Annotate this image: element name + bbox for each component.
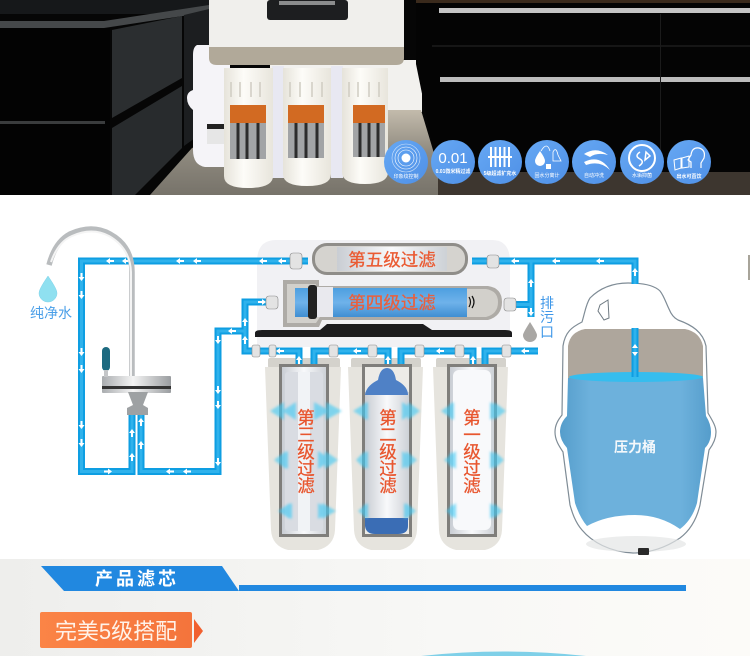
label: drain outlet: 污 [540,309,554,325]
water drop [39,276,57,302]
faucet base [102,376,171,393]
feature badges [384,140,711,184]
badge: fingerprint control: 印象纹控制 [393,173,419,180]
vertical label: first stage: 级 [463,442,481,462]
vertical label: first stage: 一 [463,425,481,445]
filter bowl: first stage [433,358,508,550]
fourth stage filter: 第四级过滤 [348,293,436,313]
unit housing [255,240,512,347]
vertical label: first stage [463,408,481,496]
vertical label: first stage: 过 [463,459,481,479]
filter bowl: third stage [265,358,341,550]
water flow diamonds [270,402,506,519]
lower section background [0,559,750,656]
badge: scale inhibition [620,140,664,184]
faucet handle [102,347,110,371]
tank water [560,378,711,529]
label: pure water: 纯净水 [30,305,72,321]
drain drop [523,322,537,342]
badge: fingerprint control [384,140,428,184]
faucet [49,229,171,415]
vertical label: third stage: 第 [297,408,315,428]
orange tag: 完美5级搭配 [55,619,177,644]
faucet stem [127,392,148,415]
faucet spout [49,229,132,377]
hero photo: kitchen with purifier [0,0,750,195]
pressure tank [555,283,716,555]
label: drain outlet: 排 [540,295,554,311]
badge: auto rinse: 自动冲洗 [584,172,604,179]
orange tag [40,612,203,648]
badge: 0.01 micron: 0.01微米精过滤 [436,168,470,175]
fifth stage filter: 第五级过滤 [348,250,436,270]
filter cartridges in photo [224,66,388,188]
badge: five stage filter: 5级超滤扩充水 [484,170,516,177]
tank label: 压力桶 [614,439,656,455]
section heading: product filters [41,566,686,591]
pressure tank in photo [187,45,230,167]
tank foot [638,548,649,555]
fourth stage filter [283,280,502,327]
pipe connectors [252,253,516,357]
tank handle [598,300,609,320]
badge: 0.01 micron: 0.01 [438,150,468,167]
badge: direct drinking: 出水可直饮 [676,173,702,180]
vertical label: second stage: 滤 [379,476,397,496]
fifth stage filter [312,243,468,275]
vertical label: second stage: 过 [379,459,397,479]
section heading: product filters: 产品滤芯 [95,569,179,589]
tank shadow [586,536,686,552]
left cabinet [0,0,210,195]
right cabinet [416,0,750,172]
background wall behind the unit [270,60,422,112]
vertical label: second stage: 级 [379,442,397,462]
filter bowl: second stage [348,358,423,550]
vertical label: third stage: 过 [297,459,315,479]
badge: five stage filter [478,140,522,184]
water pipes [82,261,635,472]
vertical label: second stage [379,408,397,496]
label: drain outlet: 口 [540,324,554,340]
black base strip [255,324,512,337]
badge: auto rinse [572,140,616,184]
vertical label: second stage: 二 [379,425,397,445]
vertical label: third stage: 级 [297,442,315,462]
vertical label: third stage: 三 [297,425,315,445]
badge: direct drinking [667,140,711,184]
filter preview top edge [421,652,586,656]
vertical label: first stage: 第 [463,408,481,428]
kitchen floor [150,110,445,195]
badge: 0.01 micron [431,140,475,184]
diagram background [0,195,750,560]
tank air space [568,329,703,378]
label: drain outlet [540,295,554,340]
purifier body [209,0,404,65]
vertical label: first stage: 滤 [463,476,481,496]
badge: scale inhibition: 水垢抑菌 [632,172,652,179]
vertical label: third stage [297,408,315,496]
badge: water design [525,140,569,184]
badge: water design: 固水分离计 [534,172,560,179]
vertical label: second stage: 第 [379,408,397,428]
flow arrows [78,258,638,474]
right floor band [438,172,750,195]
vertical label: third stage: 滤 [297,476,315,496]
